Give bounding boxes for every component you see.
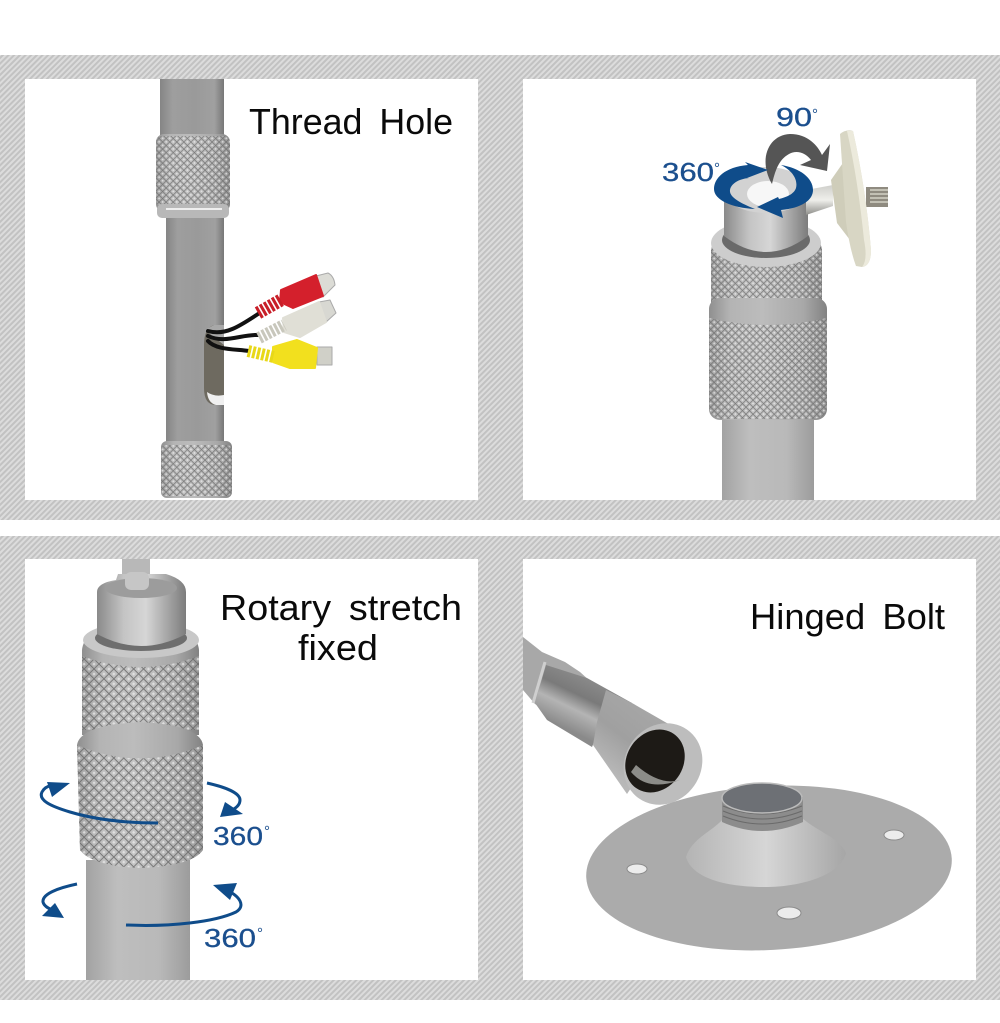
title: thread hole: Thread Hole <box>249 101 453 142</box>
lower tube <box>86 860 190 980</box>
background band: top <box>0 55 1000 520</box>
title: rotary stretch fixed: Rotary stretch <box>220 587 462 628</box>
pole, dark section <box>535 665 632 747</box>
upper knurled collar <box>82 622 199 735</box>
label: 90 degrees: ° <box>812 106 818 123</box>
flange cone <box>686 818 846 887</box>
swivel head cylinder <box>711 167 821 267</box>
arrow: rotation upper right <box>207 783 243 817</box>
mounting flange plate <box>582 777 956 959</box>
RCA cables <box>208 314 258 351</box>
lower tube with cable slot <box>166 216 224 442</box>
arrow: 90 degree tilt <box>766 134 830 184</box>
lower tube <box>722 415 814 500</box>
panel: rotary stretch fixed <box>25 559 478 980</box>
RCA connector: white <box>259 300 336 338</box>
pole collar ring <box>533 662 545 703</box>
shaft <box>122 559 150 583</box>
background band: bottom <box>0 536 1000 1000</box>
label: 360 degrees: 360 <box>662 157 714 187</box>
cable slot <box>204 325 224 405</box>
panel: hinged bolt <box>523 559 976 980</box>
upper pole section <box>160 79 224 135</box>
upper knurled collar <box>711 218 822 310</box>
panel: thread hole <box>25 79 478 500</box>
label: 360 degrees: ° <box>714 160 720 177</box>
title: hinged bolt: Hinged Bolt <box>750 596 945 637</box>
arrow: rotation lower right <box>126 883 241 925</box>
label: 360 upper: ° <box>264 823 270 840</box>
label: 360 upper: 360 <box>213 821 263 851</box>
label: 90 degrees <box>776 102 818 132</box>
pole, far section <box>523 637 600 720</box>
lower knurled collar <box>77 722 203 868</box>
head cup <box>97 572 186 646</box>
arrow: rotation lower left <box>42 884 77 918</box>
arrow: rotation upper left <box>41 782 158 823</box>
label: 90 degrees: 90 <box>776 102 812 132</box>
stud and mounting plate <box>806 130 888 267</box>
title: rotary stretch fixed: fixed <box>298 627 378 668</box>
pole, end section <box>593 690 672 794</box>
bottom knurled knob <box>161 441 232 498</box>
RCA connector: yellow <box>248 340 332 368</box>
flange screw holes <box>627 830 904 919</box>
label: 360 lower: 360 <box>204 923 256 953</box>
pole mouth <box>608 708 718 820</box>
panel: swivel ball head <box>523 79 976 500</box>
upper knurled collar <box>156 134 230 218</box>
RCA connector: red <box>258 273 335 313</box>
title: rotary stretch fixed <box>220 587 462 668</box>
lower knurled collar <box>709 298 827 420</box>
arrow: 360 degree spin <box>714 162 813 218</box>
threaded neck <box>722 783 803 831</box>
label: 360 lower: ° <box>257 925 263 942</box>
